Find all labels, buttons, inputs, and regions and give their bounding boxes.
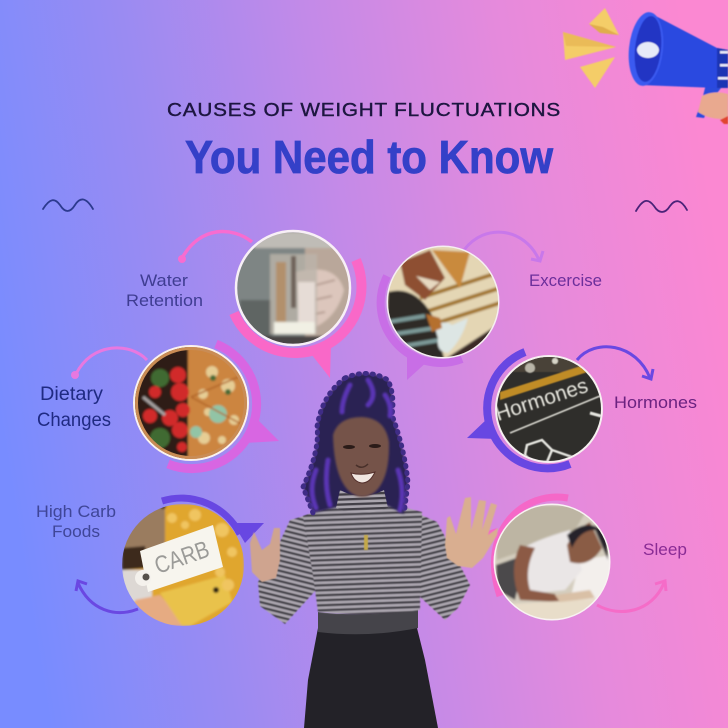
speech bubble arc xyxy=(162,498,264,543)
face xyxy=(333,417,389,497)
label: Changes xyxy=(37,410,111,431)
speech bubble arc xyxy=(234,260,361,378)
arrow xyxy=(178,231,252,263)
person: smiling woman with purple braids xyxy=(250,373,498,728)
waistband xyxy=(318,608,418,634)
speech bubble arc xyxy=(485,497,568,596)
label: High Carb xyxy=(36,503,116,521)
item: hormones xyxy=(467,347,697,468)
photo: glass of water xyxy=(237,232,349,344)
photo: treadmill runner xyxy=(388,247,498,357)
white photo backing xyxy=(495,355,603,463)
photo: chalkboard xyxy=(497,357,601,461)
left sleeve xyxy=(258,510,325,624)
item: high carb foods xyxy=(36,498,264,626)
purple hair highlights xyxy=(312,380,402,510)
label: Hormones xyxy=(614,394,697,412)
arrow xyxy=(71,348,147,379)
squiggle left xyxy=(43,199,93,211)
label: Dietary xyxy=(40,384,104,405)
item: dietary changes xyxy=(37,344,279,469)
eyes xyxy=(343,444,381,449)
sweater torso xyxy=(303,505,422,615)
right sleeve xyxy=(405,508,470,620)
label xyxy=(37,384,111,431)
speech bubble arc xyxy=(381,276,462,380)
hair xyxy=(303,373,408,514)
plate rim xyxy=(136,348,246,458)
white photo backing xyxy=(494,504,610,620)
item: sleep xyxy=(485,497,687,620)
curly hair edges xyxy=(303,373,408,514)
white photo backing xyxy=(386,246,500,358)
white photo backing xyxy=(133,345,249,461)
photo: chalkboard: Hormones xyxy=(492,374,591,426)
label xyxy=(36,503,116,541)
squiggle right xyxy=(636,201,687,212)
right hand xyxy=(445,497,498,568)
label: Retention xyxy=(126,292,203,310)
megaphone handle xyxy=(696,84,724,118)
label: Sleep xyxy=(643,541,687,559)
arrow xyxy=(577,347,653,379)
label tag: CARB xyxy=(151,536,213,580)
label: Water xyxy=(140,272,189,290)
speech bubble arc xyxy=(467,352,570,468)
photo: sleeping woman xyxy=(495,505,612,620)
heading: causes of weight fluctuations: CAUSES OF WEIGHT FLUCTUATIONS xyxy=(167,99,561,120)
pants xyxy=(304,628,438,728)
white photo ring xyxy=(236,231,350,345)
megaphone cone xyxy=(640,13,728,88)
label: Excercise xyxy=(529,272,602,290)
photo: salad and pizza xyxy=(133,345,251,461)
label: Foods xyxy=(52,523,100,541)
arrow xyxy=(597,581,666,612)
necklace pendant xyxy=(364,535,368,550)
left hand xyxy=(250,528,280,582)
arrow xyxy=(464,232,543,261)
nose xyxy=(356,464,368,467)
hand holding megaphone xyxy=(698,92,728,119)
item: excercise xyxy=(381,232,602,380)
item: water retention xyxy=(126,230,361,378)
label xyxy=(126,272,203,310)
neck xyxy=(336,490,388,513)
arrow xyxy=(76,581,138,613)
photo: carb foods xyxy=(122,503,244,626)
smile xyxy=(351,472,375,483)
icon: yellow burst triangles xyxy=(563,8,619,88)
speech bubble arc xyxy=(168,344,279,469)
heading: you need to know: You Need to Know xyxy=(185,131,553,183)
icon: megaphone xyxy=(563,8,728,124)
